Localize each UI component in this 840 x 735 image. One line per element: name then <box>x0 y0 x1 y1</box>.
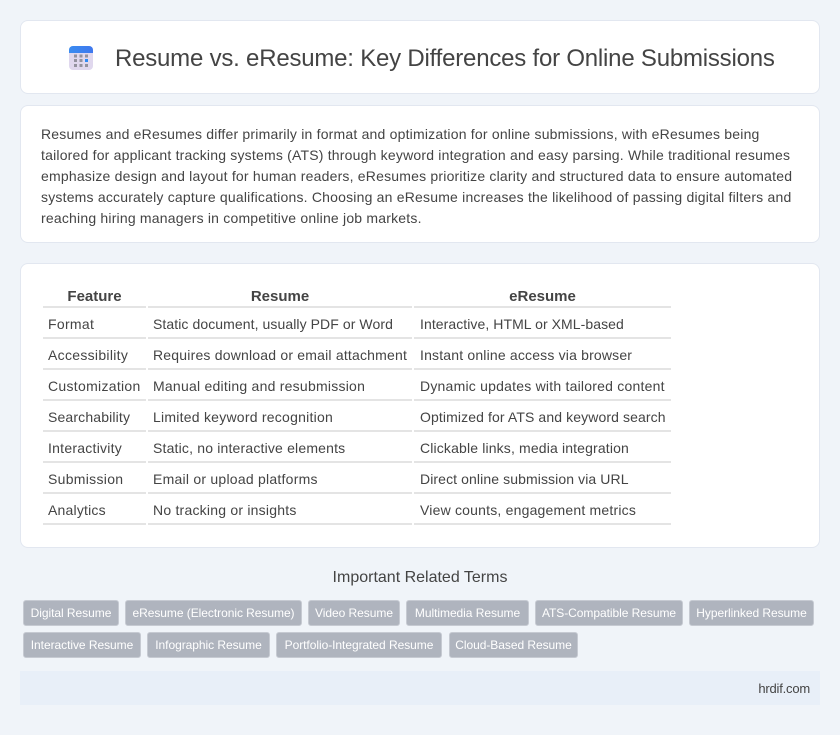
intro text: emphasize design and layout for human readers, eResumes prioritize clarity and structured data to ensure automated <box>41 168 792 184</box>
intro text: systems accurately capture qualifications. Choosing an eResume increases the likelihood of passing digital filters and <box>41 189 791 205</box>
related terms tags: Video Resume <box>315 606 393 620</box>
related terms tags: Infographic Resume <box>155 638 262 652</box>
comparison table: Limited keyword recognition <box>153 409 333 425</box>
comparison table: Static document, usually PDF or Word <box>153 316 393 332</box>
table header <box>67 288 576 305</box>
comparison table: Optimized for ATS and keyword search <box>420 409 666 425</box>
comparison table: Dynamic updates with tailored content <box>420 378 665 394</box>
comparison table: Manual editing and resubmission <box>153 378 365 394</box>
table header: Resume <box>251 288 309 305</box>
related terms tags: Hyperlinked Resume <box>696 606 807 620</box>
related terms tags: Digital Resume <box>31 606 111 620</box>
table header: Feature <box>67 288 122 305</box>
comparison panel <box>20 263 820 548</box>
comparison table: No tracking or insights <box>153 502 297 518</box>
title: Resume vs. eResume: Key Differences for Online Submissions <box>115 45 775 72</box>
header card <box>20 20 820 94</box>
intro text <box>41 126 792 226</box>
comparison table: Clickable links, media integration <box>420 440 629 456</box>
comparison table: Accessibility <box>48 347 128 363</box>
comparison table: Static, no interactive elements <box>153 440 345 456</box>
comparison table: Interactive, HTML or XML-based <box>420 316 624 332</box>
comparison table <box>43 288 671 525</box>
comparison table: Searchability <box>48 409 130 425</box>
comparison table: Direct online submission via URL <box>420 471 629 487</box>
intro text: tailored for applicant tracking systems (ATS) through keyword integration and easy parsing. While traditional resumes <box>41 147 790 163</box>
icon: calendar <box>69 46 93 70</box>
related terms heading: Important Related Terms <box>333 569 507 586</box>
related terms tags: ATS-Compatible Resume <box>542 606 676 620</box>
comparison table: Analytics <box>48 502 106 518</box>
related terms tags: Interactive Resume <box>31 638 133 652</box>
intro text: Resumes and eResumes differ primarily in format and optimization for online submissions, with eResumes being <box>41 126 760 142</box>
related terms tags: Portfolio-Integrated Resume <box>285 638 433 652</box>
comparison table: View counts, engagement metrics <box>420 502 636 518</box>
comparison table: Email or upload platforms <box>153 471 318 487</box>
comparison table: Requires download or email attachment <box>153 347 407 363</box>
intro panel <box>20 105 820 243</box>
footer bar <box>20 671 820 705</box>
related terms tags: Cloud-Based Resume <box>455 638 572 652</box>
comparison table: Instant online access via browser <box>420 347 632 363</box>
table header: eResume <box>509 288 576 305</box>
comparison table: Format <box>48 316 94 332</box>
comparison table: Submission <box>48 471 123 487</box>
intro text: reaching hiring managers in competitive online job markets. <box>41 210 422 226</box>
comparison table: Interactivity <box>48 440 122 456</box>
related terms tags: eResume (Electronic Resume) <box>132 606 295 620</box>
related terms tags <box>23 600 814 658</box>
related terms tags: Multimedia Resume <box>415 606 520 620</box>
footer source: hrdif.com <box>758 681 810 696</box>
comparison table: Customization <box>48 378 141 394</box>
